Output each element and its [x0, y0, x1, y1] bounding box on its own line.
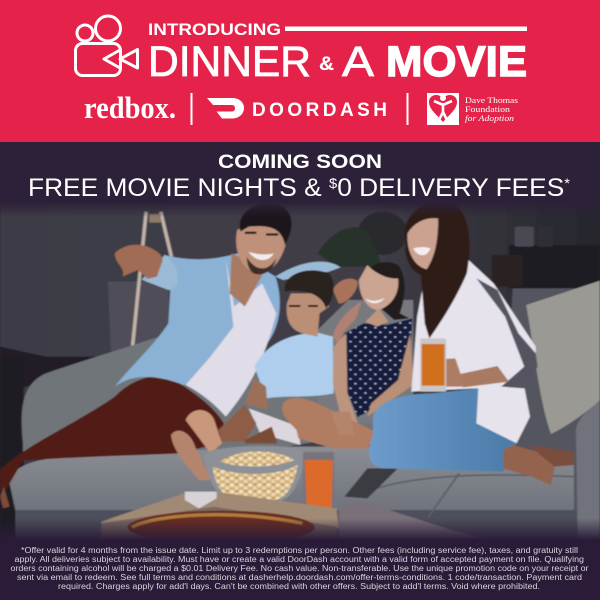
dark band behind sub-heading: [0, 142, 600, 202]
divider: [190, 93, 192, 125]
logo: doordash icon: [207, 98, 244, 118]
logo: dave thomas foundation heart: [427, 93, 459, 125]
boy: [171, 270, 334, 480]
divider: [406, 93, 408, 125]
logo: dave thomas foundation text: [465, 96, 518, 123]
popcorn bowl: [204, 446, 304, 502]
fine print: apply. All deliveries subject to availability. Must have or create a valid DoorDash account with a valid form of accepted payment on file. Qualifying: [14, 555, 584, 564]
logo: dave thomas foundation text: for Adoption: [465, 114, 514, 123]
logo: redbox: redbox.: [84, 90, 176, 125]
couch: [10, 288, 600, 540]
heading: dinner and a movie: DINNER: [148, 38, 311, 86]
icon: movie camera: [76, 16, 138, 76]
heading: free movie nights and $0 delivery fees: *: [564, 175, 571, 191]
logo: dave thomas foundation text: Foundation: [465, 105, 510, 114]
fine print: *Offer valid for 4 months from the issue date. Limit up to 3 redemptions per person. Other fees (including service fee), taxes, and gratuity still: [21, 546, 578, 555]
panel: photo of family watching a movie: [0, 190, 600, 544]
house plant: [318, 212, 408, 267]
pizza box and pizza: [101, 492, 490, 544]
man: [0, 204, 358, 508]
fine print: orders containing alcohol will be charged a $0.01 Delivery Fee. No cash value. Non-transferable. Use the unique promotion code on your receipt or: [10, 564, 589, 573]
shelves and chairs: [492, 227, 600, 288]
glass of orange juice: [303, 452, 334, 510]
heading: coming soon: COMING SOON: [218, 151, 382, 173]
woman's orange drink: [420, 338, 446, 392]
fine print: sent via email to redeem. See full terms and conditions at dasherhelp.doordash.com/offer-terms-conditions. 1 code/transaction. Payment card: [17, 573, 582, 582]
pillow: [526, 281, 600, 434]
logo: dave thomas foundation text: Dave Thomas: [465, 96, 518, 105]
floor lamp tripod: [132, 212, 171, 352]
heading: dinner and a movie: &: [319, 54, 334, 75]
logo: doordash wordmark: DOORDASH: [252, 100, 387, 121]
cabinet: [108, 282, 168, 353]
heading: free movie nights and $0 delivery fees: FREE MOVIE NIGHTS &: [28, 174, 307, 202]
decorative rule: [285, 26, 527, 31]
heading: dinner and a movie: MOVIE: [386, 38, 527, 86]
bottom fade: [0, 518, 600, 540]
girl: [282, 262, 413, 448]
panel: red header: [0, 0, 600, 142]
heading: introducing: INTRODUCING: [148, 20, 281, 39]
heading: free movie nights and $0 delivery fees: $: [329, 175, 337, 191]
woman: [369, 200, 574, 485]
fine print: [10, 546, 589, 591]
heading: dinner and a movie: A: [342, 38, 374, 86]
fine print: required. Charges apply for add'l days. Can't be combined with other offers. Subject to add'l terms. Void where prohibited.: [58, 582, 540, 591]
heading: dinner and a movie: [148, 38, 527, 86]
dark band behind fine print: [0, 540, 600, 600]
heading: free movie nights and $0 delivery fees: 0 DELIVERY FEES: [337, 174, 564, 202]
top fade: [0, 202, 600, 217]
